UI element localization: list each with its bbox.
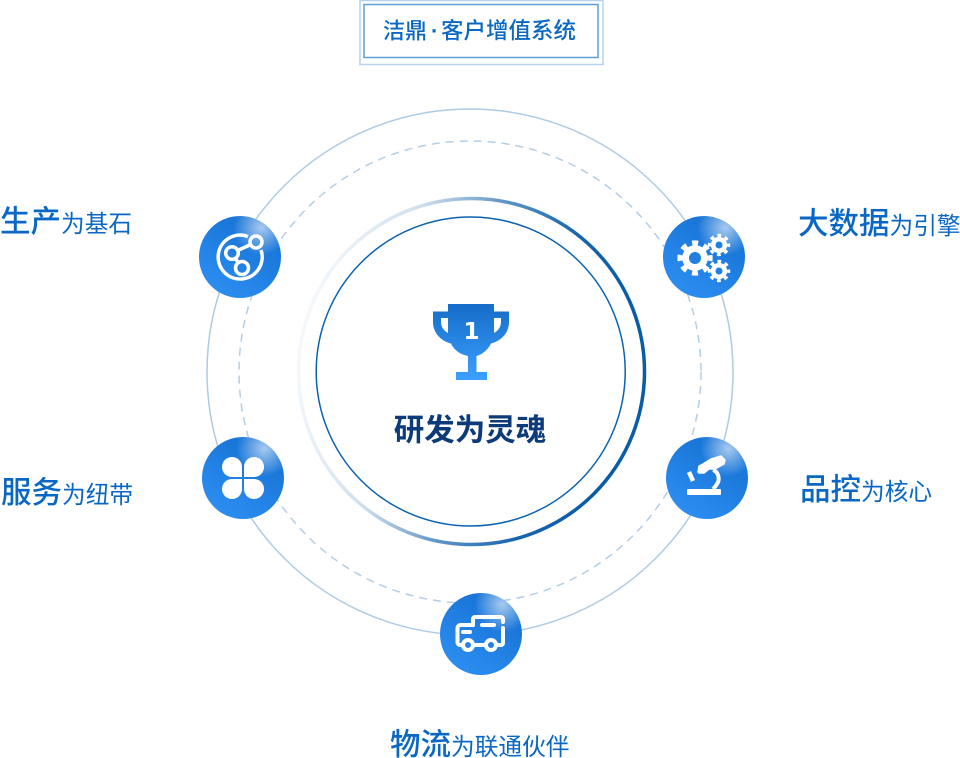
label: 服务为纽带: 服务为纽带 [1,476,133,510]
node: 大数据 [663,216,745,298]
inner circle [316,217,625,526]
center heading: 研发为灵魂 [394,414,546,448]
outer ring [207,109,733,635]
trophy number: 1 [463,319,480,345]
title text: · [431,18,438,44]
icon: trophy [433,304,509,380]
title box [360,0,603,64]
title text: 客户增值系统 [441,18,576,44]
icon: truck [458,617,503,650]
title text: 洁鼎 [383,18,427,44]
label: 品控为核心: 品控为核心 [800,473,932,507]
node: 品控 [666,437,748,519]
gradient ring [298,198,644,544]
icon: network [218,235,262,279]
icon: gears [680,235,729,281]
label: 生产为基石: 生产为基石 [0,205,132,239]
dashed ring [239,141,701,603]
label: 大数据为引擎: 大数据为引擎 [798,207,960,241]
node: 生产 [199,216,281,298]
icon: microscope [687,456,725,495]
node: 物流 [440,593,522,675]
node: 服务 [202,437,284,519]
icon: clover [222,457,264,499]
